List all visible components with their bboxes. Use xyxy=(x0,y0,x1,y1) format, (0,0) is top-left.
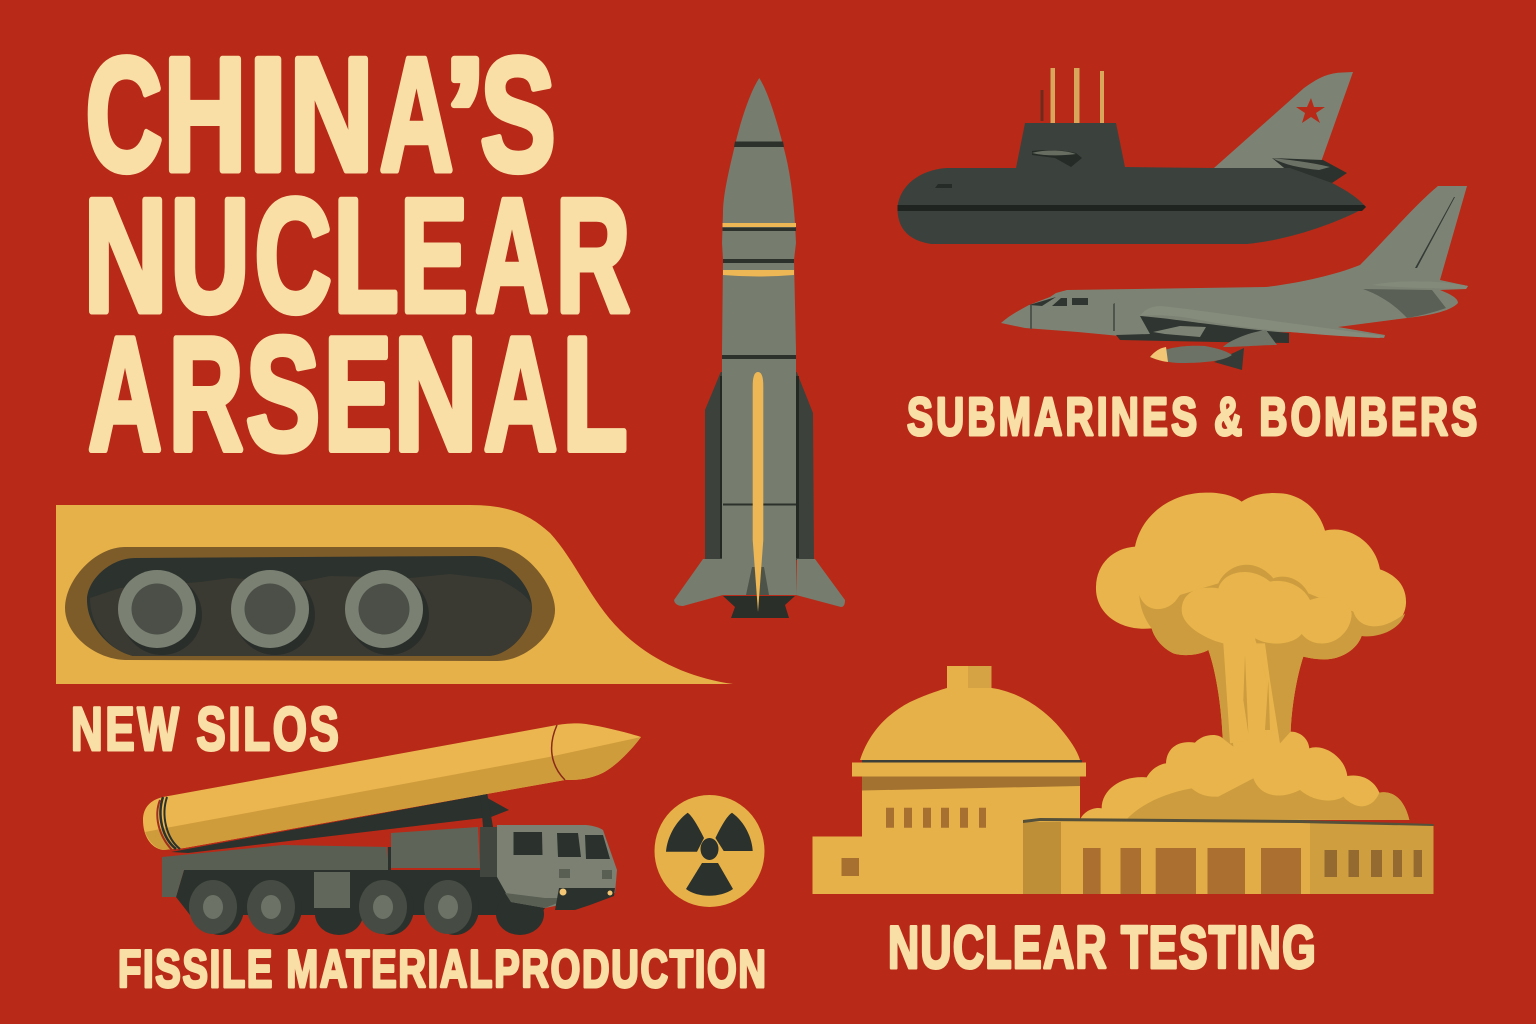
label: nuclear testing: NUCLEAR TESTING xyxy=(888,915,1316,982)
title: H xyxy=(164,25,246,205)
title: C xyxy=(86,25,162,204)
title: ’ xyxy=(444,25,486,205)
truck cab xyxy=(497,825,617,908)
truck chassis xyxy=(176,870,545,915)
title: S xyxy=(480,25,556,205)
title: L xyxy=(334,166,398,345)
title: E xyxy=(324,304,392,484)
title: A xyxy=(484,304,557,484)
launcher arm xyxy=(171,795,509,853)
icon: new silos xyxy=(56,505,733,684)
title: E xyxy=(400,165,468,346)
icon: ballistic missile xyxy=(674,78,845,618)
label: new silos: NEW SILOS xyxy=(71,696,339,764)
label: submarines and bombers: SUBMARINES & BOMBERS xyxy=(907,386,1477,446)
icon: radiation symbol xyxy=(654,795,764,907)
title: L xyxy=(563,304,627,484)
icon: submarine and bomber xyxy=(897,68,1468,370)
title: C xyxy=(255,166,331,345)
submarine hull xyxy=(897,123,1366,244)
title: A xyxy=(380,24,453,205)
title: N xyxy=(84,165,167,345)
title: U xyxy=(170,166,250,346)
title: I xyxy=(248,26,288,205)
title: N xyxy=(394,304,477,484)
label: fissile material production: FISSILE MATERIALPRODUCTION xyxy=(118,939,766,998)
title: A xyxy=(88,304,162,484)
bomber missile xyxy=(1214,348,1244,370)
title: N xyxy=(290,24,373,204)
missile on launcher xyxy=(143,723,641,850)
submarine masts xyxy=(1040,90,1044,121)
title: A xyxy=(475,165,549,346)
title: R xyxy=(556,166,630,346)
cloud shading xyxy=(1139,565,1405,747)
submarine tail fin with star xyxy=(1214,72,1353,172)
title: S xyxy=(246,305,320,484)
title xyxy=(84,24,630,484)
icon: reactor dome building xyxy=(812,666,1434,894)
title: R xyxy=(169,304,243,484)
icon: missile launcher truck xyxy=(143,723,641,935)
truck wheels xyxy=(196,881,479,935)
icon: mushroom cloud xyxy=(1080,493,1409,820)
bomber fuselage xyxy=(1001,186,1468,338)
